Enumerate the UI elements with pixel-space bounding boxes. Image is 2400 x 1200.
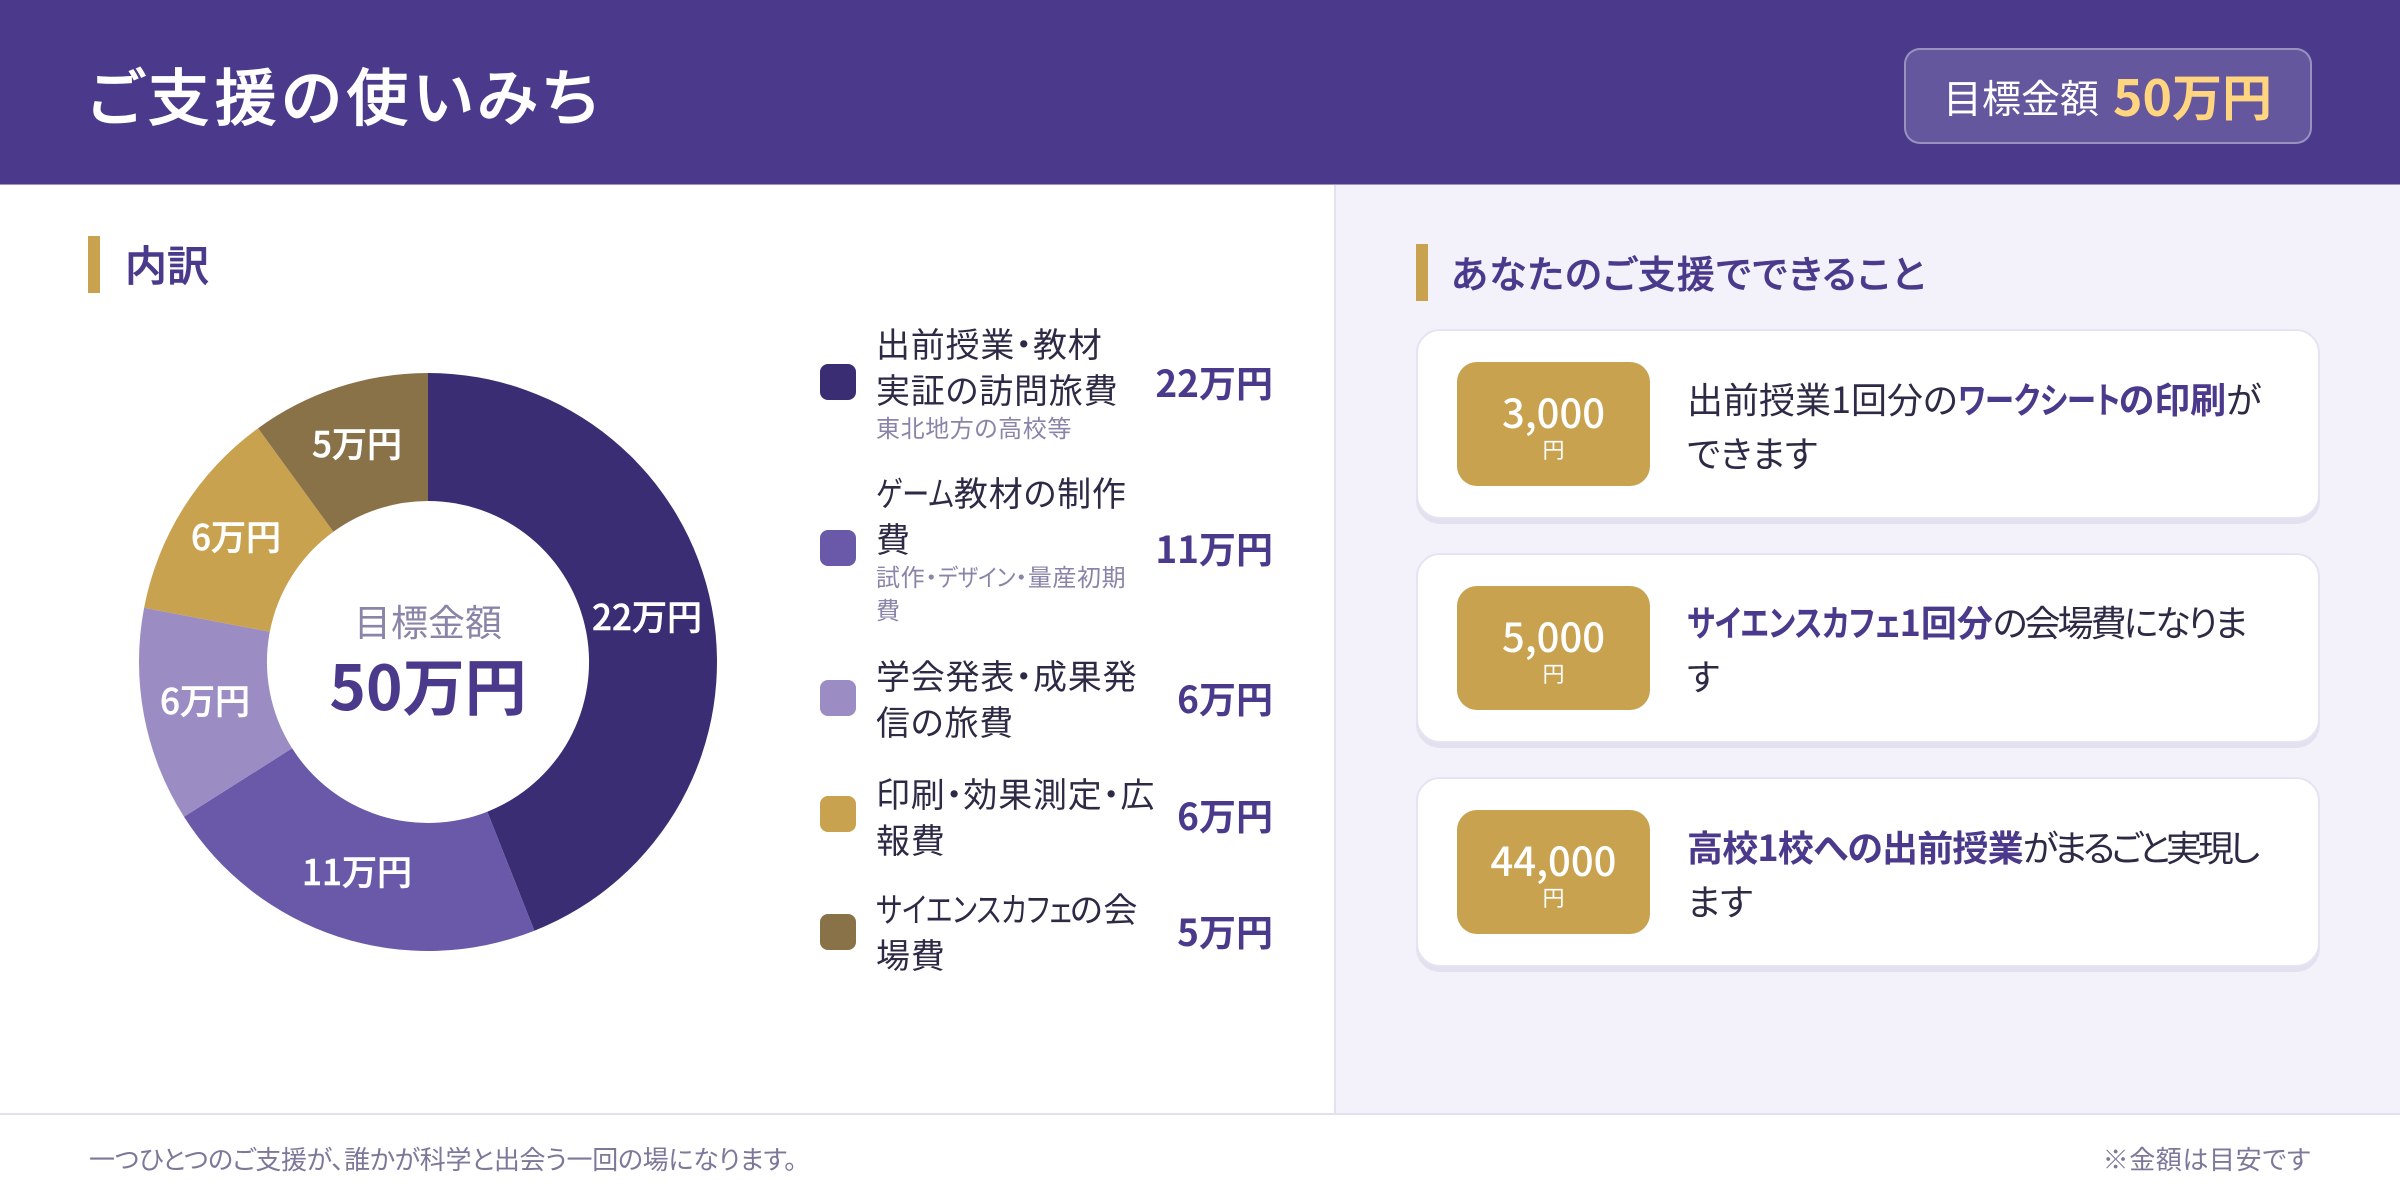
price tag: 3,000 [1502, 382, 1605, 440]
description: できます [1687, 426, 1818, 478]
amount: 11万円 [1155, 520, 1273, 574]
label [876, 467, 1127, 626]
donut labels: 6万円 [160, 674, 250, 725]
price tag [1457, 362, 1650, 486]
segment: conference 6 [139, 608, 292, 817]
header band [0, 0, 2400, 185]
label: 場費 [876, 929, 946, 978]
heading: breakdown: 内訳 [125, 233, 209, 294]
label [876, 883, 1138, 978]
label: 東北地方の高校等 [876, 409, 1072, 444]
label: 費 [876, 513, 911, 562]
price tag [1457, 810, 1650, 934]
amount: 5万円 [1177, 903, 1273, 957]
amount: 22万円 [1155, 354, 1273, 408]
donut labels: 22万円 [592, 590, 702, 641]
label [876, 318, 1118, 444]
label: 出前授業・教材 [876, 318, 1103, 367]
legend row: printing [820, 768, 1273, 863]
price tag: 円 [1542, 433, 1564, 465]
legend [820, 318, 1273, 978]
description: サイエンスカフェ [1687, 595, 1901, 647]
accent bar [1416, 244, 1428, 301]
label: 印刷・効果測定・広 [876, 768, 1155, 817]
card: 3,000 yen [1416, 329, 2320, 519]
label: 報費 [876, 814, 946, 863]
description [1687, 595, 2245, 701]
description: す [1687, 649, 1720, 701]
legend row: conference [820, 650, 1273, 745]
heading: what your support can do: あなたのご支援でできること [1451, 244, 1926, 299]
amount: 6万円 [1177, 787, 1273, 841]
price tag: 円 [1542, 657, 1564, 689]
description: 1回分の会場費になりま [1900, 595, 2245, 647]
label: 費 [876, 591, 901, 626]
price tag: 円 [1542, 881, 1564, 913]
swatch [820, 796, 856, 832]
label: 学会発表・成果発 [876, 650, 1137, 699]
donut labels: 6万円 [191, 510, 281, 561]
panel: what your support can do [1336, 185, 2400, 1113]
donut chart [139, 373, 717, 951]
amount: 6万円 [1177, 670, 1273, 724]
label: ゲーム [876, 467, 954, 516]
accent bar [88, 236, 100, 293]
label: 信の旅費 [876, 696, 1014, 745]
donut center value: 50万円 [329, 638, 527, 728]
description [1687, 372, 2261, 478]
footer note: ※金額は目安です [2103, 1140, 2311, 1177]
description: ワークシート [1958, 372, 2120, 424]
donut labels: 5万円 [312, 417, 402, 468]
price tag: 44,000 [1491, 830, 1616, 888]
segment: game materials 11 [184, 748, 534, 951]
swatch [820, 530, 856, 566]
legend row: game materials [820, 467, 1273, 626]
legend row: outreach [820, 318, 1273, 444]
badge label: 目標金額 [1943, 69, 2099, 125]
label: サイエンスカフェ [876, 883, 1072, 932]
label: 試作・ ・量産初期 [876, 558, 1126, 593]
label [876, 768, 1155, 863]
description: 高校1校への出前授業がまるごと実現し [1687, 820, 2256, 872]
footer [0, 1113, 2400, 1200]
price tag: 5,000 [1502, 606, 1605, 664]
card: 44,000 yen [1416, 777, 2320, 967]
donut labels: 11万円 [302, 845, 412, 896]
label: の会 [1070, 883, 1138, 932]
badge value: 50万円 [2113, 59, 2272, 131]
label [876, 650, 1137, 745]
goal amount badge [1904, 48, 2312, 144]
segment: science cafe 5 [258, 373, 428, 532]
price tag [1457, 586, 1650, 710]
description: 出前授業1回分の の印刷が [1687, 372, 2261, 424]
label: 実証の訪問旅費 [876, 364, 1118, 413]
description [1687, 820, 2259, 926]
donut labels [160, 417, 702, 896]
label: デザイン [938, 558, 1015, 593]
footer message: 一つひとつのご支援が、誰かが科学と出会う一回の場になります。 [89, 1140, 797, 1177]
segment: printing 6 [144, 428, 333, 632]
segment: outreach 22 [428, 373, 717, 931]
donut center label: 目標金額 [354, 593, 502, 647]
swatch [820, 680, 856, 716]
title: ご支援の使いみち [88, 48, 602, 138]
panel: breakdown [0, 185, 1336, 1113]
description: ます [1687, 874, 1753, 926]
swatch [820, 914, 856, 950]
label: 教材の制作 [954, 467, 1127, 516]
swatch [820, 364, 856, 400]
legend row: science cafe [820, 883, 1273, 978]
card: 5,000 yen [1416, 553, 2320, 743]
